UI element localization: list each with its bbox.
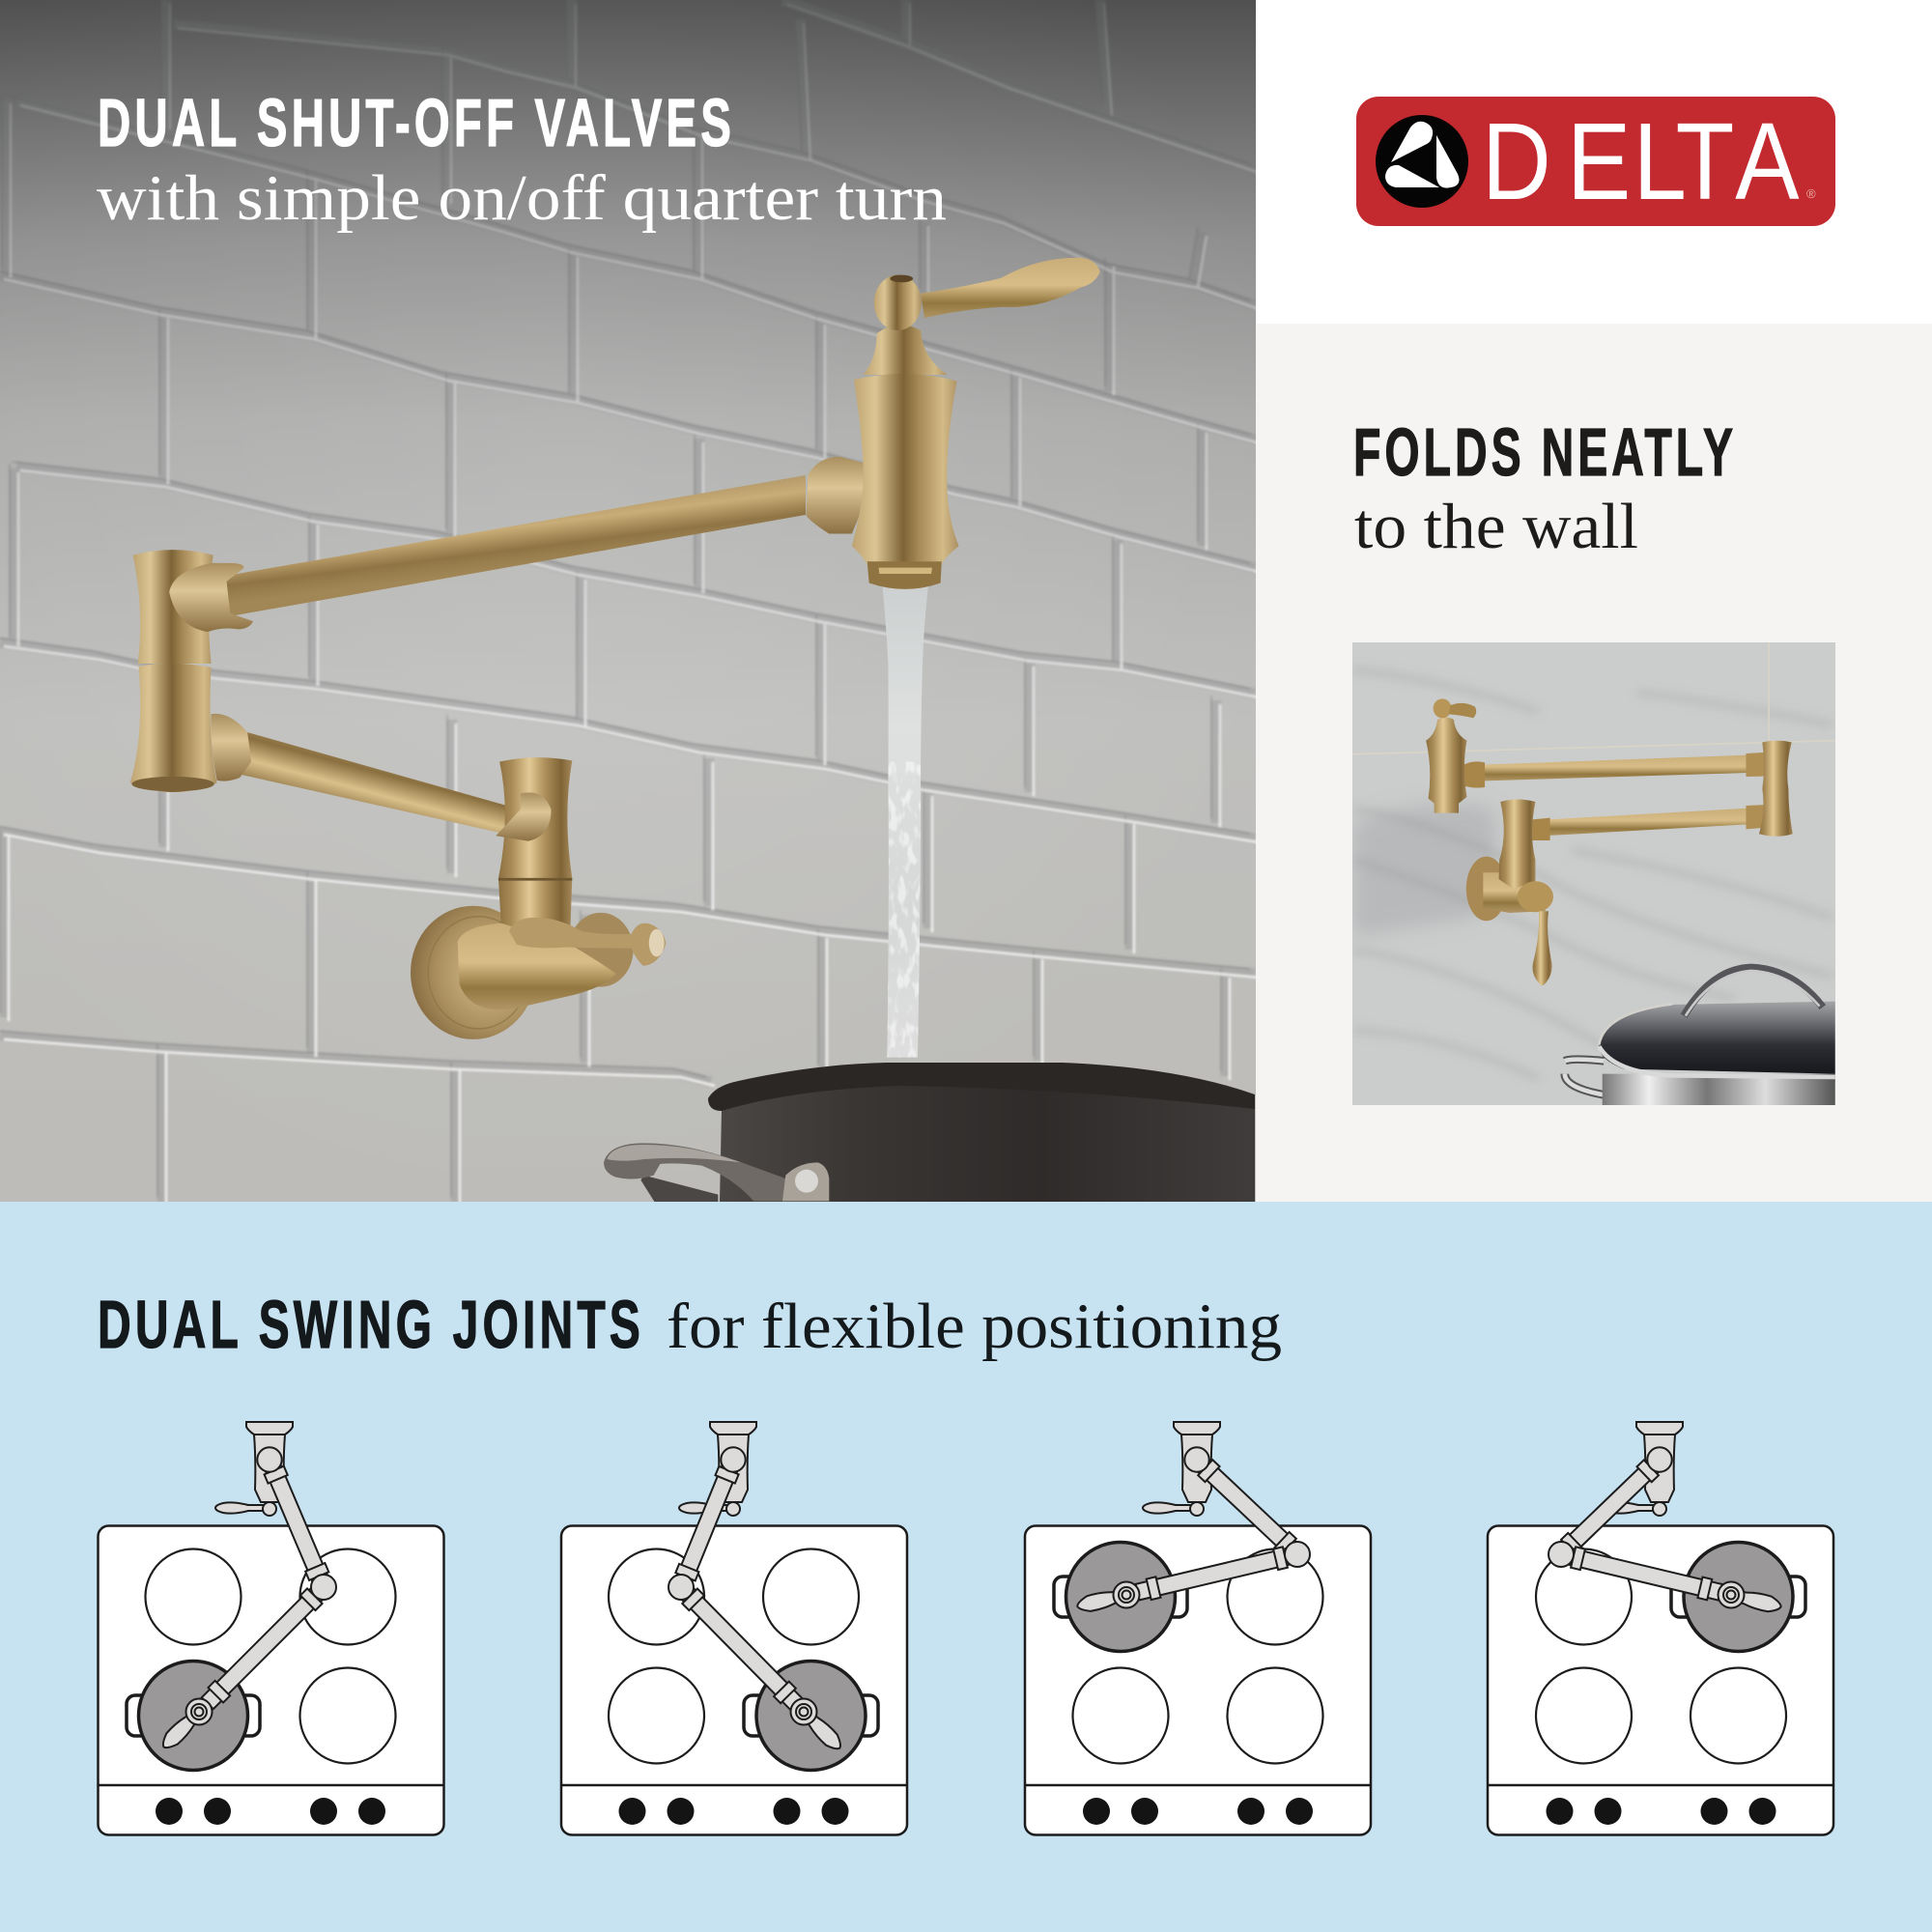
- lower arm: [1548, 809, 1747, 836]
- faucet: folding arms: [226, 475, 806, 837]
- heading: dual shut-off valves: DUAL SHUT-OFF VALVES: [98, 85, 735, 160]
- tiled wall: [0, 0, 1260, 1206]
- valve column and wall mount: [1466, 856, 1501, 922]
- Delta logo: DELTA: [1482, 100, 1800, 222]
- pot: [1671, 1542, 1805, 1652]
- cooking pot: [604, 1063, 1255, 1210]
- heading: folds neatly: FOLDS NEATLY: [1353, 414, 1737, 490]
- panel: light side panel: [1256, 324, 1932, 1202]
- lower lever handle: [509, 918, 666, 966]
- wall flange: [411, 906, 536, 1039]
- diagram: cooktop position 4: [1488, 1422, 1833, 1835]
- Delta logo: ®: [1806, 186, 1816, 201]
- heading: dual shut-off valves: [97, 85, 947, 234]
- faucet arm: [1548, 1422, 1783, 1617]
- faucet arm: [668, 1422, 847, 1755]
- pot: [127, 1662, 260, 1770]
- heading: dual swing joints: for flexible positioning: [667, 1291, 1282, 1362]
- faucet: upper valve, spout and lever: [806, 258, 1100, 589]
- heading: dual swing joints: [98, 1287, 1282, 1362]
- heading: folds neatly: [1353, 414, 1737, 562]
- pot: [744, 1662, 878, 1770]
- faucet arm: [156, 1422, 336, 1754]
- valve lever: [1533, 911, 1552, 985]
- diagram: cooktop position 1: [98, 1422, 444, 1835]
- water stream: [883, 586, 928, 1058]
- heading: dual swing joints: DUAL SWING JOINTS: [98, 1287, 644, 1362]
- faucet: elbow column and lower valve: [130, 550, 666, 1039]
- diagram: cooktop position 2: [560, 1422, 907, 1835]
- panel: dual swing joints background: [0, 1202, 1932, 1932]
- Delta logo: [1356, 97, 1835, 226]
- panel: main photo of pot filler faucet: [0, 0, 1260, 1210]
- heading: dual shut-off valves: with simple on/off quarter turn: [97, 162, 947, 234]
- heading: folds neatly: to the wall: [1354, 491, 1638, 562]
- pot: [1054, 1542, 1187, 1652]
- spout body: [1426, 717, 1466, 813]
- stock pot with glass lid: [1565, 968, 1835, 1105]
- photo: faucet folded to wall: [1352, 642, 1835, 1105]
- faucet arm: [1075, 1422, 1310, 1617]
- pot handle: [604, 1143, 829, 1202]
- diagram: cooktop position 3: [1024, 1422, 1371, 1835]
- folded elbow: [1759, 741, 1793, 837]
- upper arm: [1483, 755, 1747, 781]
- marble veins: [1352, 669, 1833, 1079]
